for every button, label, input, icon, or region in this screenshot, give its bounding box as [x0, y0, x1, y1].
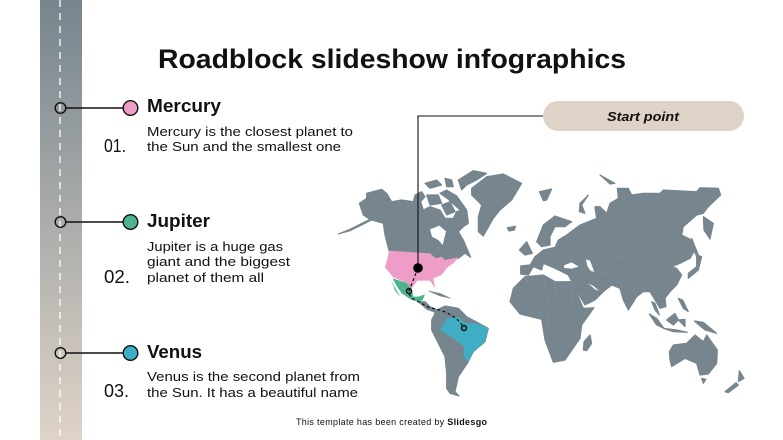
number 02: 02.	[104, 267, 130, 287]
description: Jupiter: planet of them all	[147, 270, 264, 285]
New Guinea	[694, 321, 717, 333]
world map: Americas	[338, 171, 522, 396]
footer credit: This template has been created by Slidesgo	[296, 417, 488, 427]
Indonesia and Philippines	[649, 298, 688, 332]
Arctic islands	[425, 171, 487, 222]
description: Venus: Venus is the second planet from	[147, 369, 360, 384]
description: Jupiter: giant and the biggest	[147, 254, 290, 269]
world map: Europe, Africa, Asia, Oceania	[507, 175, 744, 393]
Caspian Sea	[586, 259, 594, 272]
North America	[338, 189, 471, 262]
description: Venus: the Sun. It has a beautiful name	[147, 385, 358, 400]
heading: Mercury: Mercury	[147, 96, 221, 116]
number 01: 01.	[104, 136, 126, 156]
start dot	[413, 263, 423, 273]
description: Venus	[147, 369, 360, 400]
dashed route path	[409, 268, 464, 328]
Central America	[418, 302, 437, 312]
start point leader line	[418, 116, 543, 268]
Iceland and Svalbard	[507, 189, 552, 231]
item: Jupiter	[55, 211, 290, 287]
Australia	[669, 335, 717, 375]
Iceland	[508, 226, 515, 231]
heading: Jupiter: Jupiter	[147, 211, 210, 231]
description: Mercury: Mercury is the closest planet to	[147, 124, 353, 139]
Arctic islands	[579, 175, 615, 218]
Caribbean islands	[428, 291, 451, 298]
Black Sea	[564, 262, 579, 269]
Eurasia	[521, 188, 721, 310]
description: Mercury: the Sun and the smallest one	[147, 139, 341, 154]
start point pill: Start point	[607, 109, 680, 124]
British Isles	[519, 242, 532, 255]
Scandinavia	[537, 216, 572, 247]
road	[40, 0, 82, 440]
Africa	[510, 275, 594, 362]
stop marker: Brazil	[462, 326, 466, 330]
Sakhalin and Japan	[688, 238, 702, 278]
Hudson Bay	[430, 226, 446, 245]
Persian Gulf	[588, 283, 599, 291]
country borders	[525, 252, 667, 340]
Madagascar	[583, 335, 592, 351]
Greenland	[472, 174, 522, 236]
description: Mercury	[147, 124, 353, 154]
road marker and connector: Jupiter	[55, 215, 138, 229]
title: Roadblock slideshow infographics	[158, 44, 626, 74]
Brazil	[440, 317, 488, 362]
description: Jupiter: Jupiter is a huge gas	[147, 239, 284, 254]
Kamchatka	[703, 217, 713, 239]
Southeast Asia peninsula	[652, 302, 659, 315]
start point pill	[543, 101, 744, 131]
description: Jupiter	[147, 239, 290, 285]
Mexico	[391, 278, 425, 302]
stop marker: Mexico	[406, 288, 412, 294]
New Zealand	[725, 371, 744, 393]
road marker and connector: Venus	[55, 346, 138, 360]
route	[406, 116, 543, 330]
Tasmania	[702, 378, 706, 383]
South America	[432, 306, 488, 396]
heading: Venus: Venus	[147, 342, 202, 362]
item: Venus	[55, 342, 360, 401]
item: Mercury	[55, 96, 353, 156]
number 03: 03.	[104, 381, 129, 401]
United States	[385, 251, 458, 288]
road marker and connector: Mercury	[55, 101, 138, 115]
